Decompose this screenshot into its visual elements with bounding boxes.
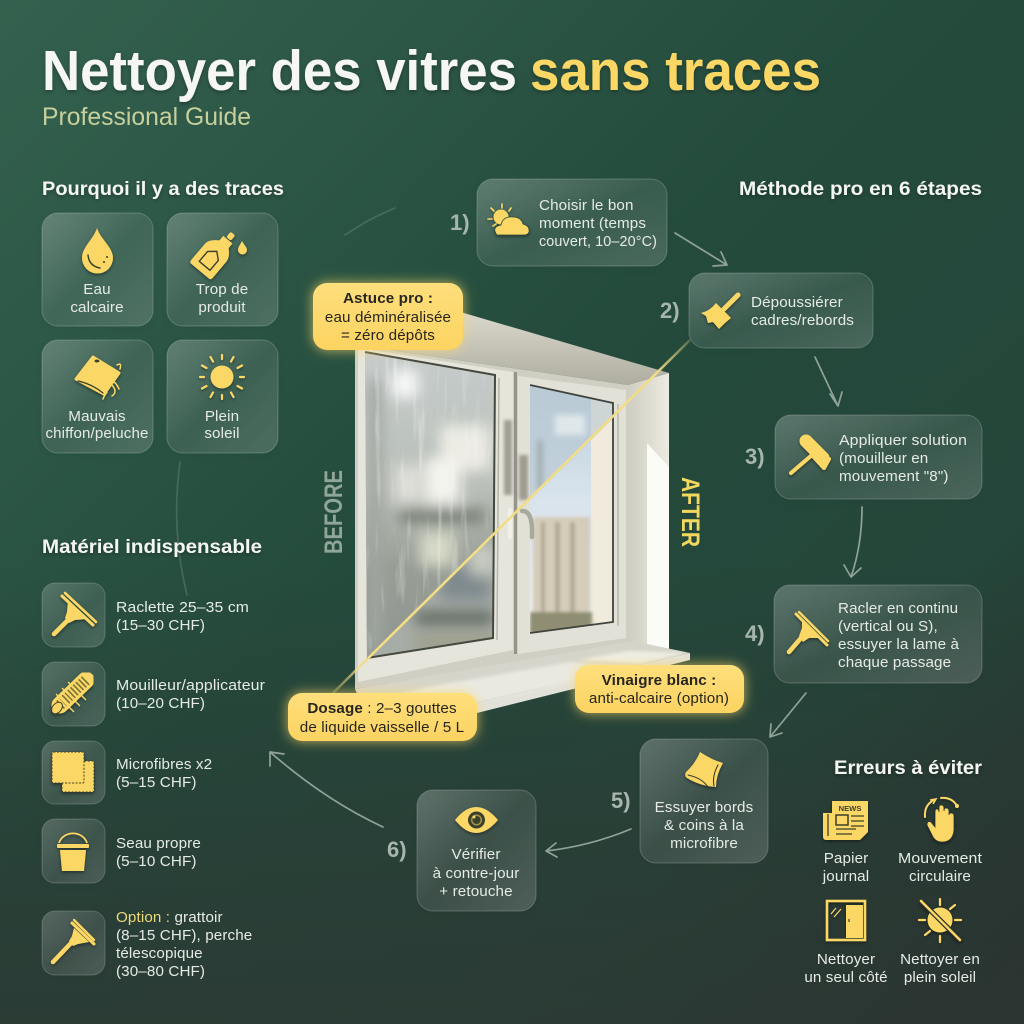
item: option <box>42 909 252 980</box>
error: un seul cote: un seul côté <box>804 969 888 986</box>
card: eau calcaire: calcaire <box>70 299 124 316</box>
card: eau calcaire <box>42 213 153 326</box>
step 2: cadres/rebords <box>751 312 854 329</box>
arrow: 1 to 2 <box>675 233 727 266</box>
callout: vinaigre: Vinaigre blanc : <box>602 672 716 689</box>
item: raclette: (15–30 CHF) <box>116 617 205 634</box>
step number: 4) <box>745 621 765 646</box>
step 1 <box>450 179 667 266</box>
left sash <box>358 348 513 682</box>
icon: newspaper: NEWS <box>839 804 861 813</box>
icon: scraper <box>53 920 94 962</box>
error: plein soleil <box>900 899 980 986</box>
item: seau <box>42 819 201 883</box>
item: seau: (5–10 CHF) <box>116 853 197 870</box>
error: papier journal: Papier <box>824 850 868 867</box>
step number: 5) <box>611 788 631 813</box>
card: plein soleil: soleil <box>204 425 240 442</box>
error: plein soleil: Nettoyer en <box>900 951 980 968</box>
error: mouvement circulaire: circulaire <box>909 868 971 885</box>
card: plein soleil: Plein <box>205 408 239 425</box>
item: mouilleur: (10–20 CHF) <box>116 695 205 712</box>
step number: 3) <box>745 444 765 469</box>
card: mauvais chiffon <box>42 340 153 453</box>
arrow: 6 to materiel <box>270 752 383 827</box>
icon: brush <box>701 295 738 329</box>
step 6: à contre-jour <box>433 865 519 882</box>
step number: 1) <box>450 210 470 235</box>
callout: dosage <box>288 693 477 741</box>
window frame <box>355 345 628 689</box>
icon: sun <box>200 355 244 399</box>
item: seau: Seau propre <box>116 835 201 852</box>
item: option: télescopique <box>116 945 203 962</box>
subtitle: Professional Guide <box>42 103 251 131</box>
card: eau calcaire: Eau <box>83 281 111 298</box>
step 5: Essuyer bords <box>655 799 754 816</box>
title <box>42 39 821 103</box>
item: option: Option : grattoir <box>116 909 223 926</box>
icon: roller sleeve <box>49 680 86 716</box>
heading: materiel: Matériel indispensable <box>42 536 262 558</box>
icon: bucket <box>57 833 89 871</box>
icon: drop <box>82 228 113 274</box>
icon: sun and cloud <box>488 204 529 235</box>
error: un seul cote <box>804 901 888 986</box>
icon: hand with rotation <box>925 798 959 842</box>
item: option: (8–15 CHF), perche <box>116 927 252 944</box>
step 1: couvert, 10–20°C) <box>539 233 657 250</box>
step 4: Racler en continu <box>838 600 958 617</box>
icon: cloth <box>685 752 723 787</box>
callout: astuce pro: eau déminéralisée <box>325 309 451 326</box>
step 4: (vertical ou S), <box>838 618 938 635</box>
icon: crossed sun <box>919 899 961 942</box>
item: mouilleur: Mouilleur/applicateur <box>116 677 265 694</box>
step 3 <box>745 415 982 499</box>
error: mouvement circulaire: Mouvement <box>898 850 983 867</box>
card: trop de produit <box>167 213 278 326</box>
card: plein soleil <box>167 340 278 453</box>
callout: vinaigre <box>575 665 744 713</box>
title: sans traces <box>530 39 821 103</box>
arrow: 5 to 6 <box>546 829 631 857</box>
label: before: BEFORE <box>320 470 348 554</box>
icon: paint roller <box>791 441 829 473</box>
icon: bottle <box>189 224 247 280</box>
window illustration <box>333 306 690 716</box>
callout: astuce pro: = zéro dépôts <box>341 327 435 344</box>
card: mauvais chiffon: chiffon/peluche <box>46 425 148 442</box>
error: mouvement circulaire <box>898 798 983 885</box>
callout: astuce pro: Astuce pro : <box>343 290 433 307</box>
step 3: (mouilleur en <box>839 450 928 467</box>
step 4 <box>745 585 982 683</box>
arrow: 2 to 3 <box>815 357 842 406</box>
step 5: & coins à la <box>664 817 744 834</box>
arrow: 4 to 5 <box>770 693 806 737</box>
item: option: (30–80 CHF) <box>116 963 205 980</box>
item: mouilleur <box>42 662 265 726</box>
diagonal divider <box>333 340 690 693</box>
icon: squeegee <box>789 612 828 652</box>
step 4: chaque passage <box>838 654 951 671</box>
icon: rag <box>76 357 121 399</box>
card: trop de produit: Trop de <box>196 281 248 298</box>
heading: erreurs: Erreurs à éviter <box>834 757 982 779</box>
step 3: Appliquer solution <box>839 432 967 449</box>
step 6: + retouche <box>439 883 513 900</box>
arrow: 3 to 4 <box>844 507 862 577</box>
error: un seul cote: Nettoyer <box>817 951 875 968</box>
item: raclette <box>42 583 249 647</box>
connector: faint lines <box>177 208 395 595</box>
error: papier journal: journal <box>822 868 869 885</box>
card: trop de produit: produit <box>198 299 246 316</box>
item: microfibres <box>42 741 212 804</box>
step number: 2) <box>660 298 680 323</box>
step number: 6) <box>387 837 407 862</box>
icon: cloths <box>52 752 94 792</box>
error: plein soleil: plein soleil <box>904 969 976 986</box>
window handle <box>510 510 532 537</box>
step 4: essuyer la lame à <box>838 636 959 653</box>
callout: vinaigre: anti-calcaire (option) <box>589 690 729 707</box>
heading: methode: Méthode pro en 6 étapes <box>739 178 982 200</box>
card: mauvais chiffon: Mauvais <box>68 408 126 425</box>
right sash <box>518 376 626 654</box>
step 5 <box>611 739 768 863</box>
step 6 <box>387 790 536 911</box>
step 5: microfibre <box>670 835 738 852</box>
heading: pourquoi: Pourquoi il y a des traces <box>42 178 284 200</box>
icon: half clean window <box>827 901 865 940</box>
item: raclette: Raclette 25–35 cm <box>116 599 249 616</box>
step 6: Vérifier <box>451 846 501 863</box>
step 2 <box>660 273 873 348</box>
error: papier journal <box>822 801 869 885</box>
step 1: Choisir le bon <box>539 197 634 214</box>
icon: squeegee <box>54 593 96 634</box>
item: microfibres: Microfibres x2 <box>116 756 212 773</box>
callout: dosage: de liquide vaisselle / 5 L <box>300 719 464 736</box>
callout: astuce pro <box>313 283 463 350</box>
label: after: AFTER <box>676 477 704 547</box>
mullion and mould <box>504 372 528 654</box>
step 3: mouvement "8") <box>839 468 949 485</box>
wall reveal and sill <box>355 306 690 716</box>
title: Nettoyer des vitres <box>42 39 517 103</box>
callout: dosage: Dosage : 2–3 gouttes <box>307 700 457 717</box>
item: microfibres: (5–15 CHF) <box>116 774 197 791</box>
step 2: Dépoussiérer <box>751 294 843 311</box>
step 1: moment (temps <box>539 215 646 232</box>
icon: eye <box>455 807 498 833</box>
